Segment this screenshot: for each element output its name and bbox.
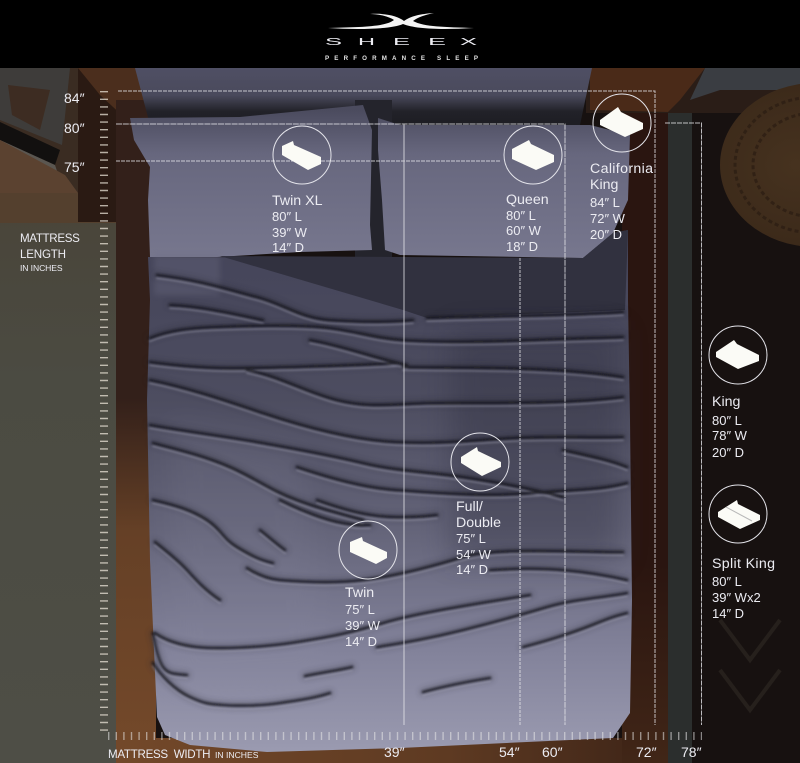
- logo wordmark: E: [428, 37, 447, 48]
- callout: King: 78″ W: [712, 428, 748, 443]
- callout: Split King: 80″ L: [712, 574, 742, 589]
- floor: left side: [0, 215, 118, 763]
- logo: SHEEX Performance Sleep: [325, 13, 478, 62]
- callout: Full/Double: 75″ L: [456, 531, 486, 546]
- callout: Twin: Twin: [345, 585, 374, 601]
- length ruler ticks: [100, 91, 108, 733]
- top right corner: [586, 68, 800, 113]
- length axis labels: 84″: [64, 90, 85, 106]
- width axis labels: 54″: [499, 744, 520, 760]
- width axis labels: 39″: [384, 744, 405, 760]
- logo wordmark: X: [460, 37, 478, 48]
- callout: Full/Double: 54″ W: [456, 547, 492, 562]
- callout: Full/Double: [451, 433, 509, 577]
- shadow behind pillows: [355, 100, 392, 258]
- logo wordmark: E: [393, 37, 411, 48]
- length axis labels: [64, 90, 85, 175]
- axis title: mattress length: [20, 232, 80, 273]
- callout: Queen: 60″ W: [506, 223, 542, 238]
- logo tagline: PERFORMANCE SLEEP: [325, 55, 478, 62]
- headboard post: [78, 68, 165, 222]
- callout: King: 80″ L: [712, 413, 742, 428]
- width axis labels: 78″: [681, 744, 702, 760]
- callout: Twin: [339, 521, 397, 649]
- guide lines for each mattress size: [116, 91, 702, 725]
- callout: Split King: [709, 485, 775, 621]
- callout: California King: California: [590, 161, 653, 177]
- callout: California King: 20″ D: [590, 227, 622, 242]
- axis title: mattress length: MATTRESS: [20, 232, 80, 245]
- callout: King: King: [712, 394, 740, 410]
- callout: Split King: Split King: [712, 556, 775, 572]
- callout: Twin XL: 80″ L: [272, 209, 302, 224]
- logo wordmark: H: [358, 37, 375, 48]
- callout: King: [709, 326, 767, 460]
- header band: [0, 0, 800, 68]
- callout: Twin XL: 39″ W: [272, 225, 308, 240]
- callout: Twin: 75″ L: [345, 602, 375, 617]
- width ruler ticks: [108, 732, 702, 740]
- callout: Queen: [504, 126, 562, 254]
- callout: California King: [590, 94, 653, 242]
- callout: Twin XL: 14″ D: [272, 240, 304, 255]
- callout: California King: 84″ L: [590, 195, 620, 210]
- side table: top left: [0, 68, 118, 223]
- dark floor strip on the right: [668, 110, 692, 763]
- callout: Twin XL: [272, 126, 331, 255]
- width axis labels: 72″: [636, 744, 657, 760]
- width axis labels: 60″: [542, 744, 563, 760]
- axis title: mattress width: IN INCHES: [215, 750, 259, 760]
- logo swoosh mark: [328, 13, 474, 29]
- left bed frame: [116, 100, 156, 763]
- bottom bed frame: [116, 738, 668, 763]
- right pillow: [378, 118, 630, 258]
- left pillow: [130, 105, 372, 257]
- right bed frame: [622, 100, 668, 763]
- sheet shading: [154, 230, 628, 690]
- callout: Queen: Queen: [506, 192, 549, 208]
- axis title: mattress length: LENGTH: [20, 248, 66, 261]
- logo wordmark: S: [325, 37, 343, 48]
- length axis labels: 80″: [64, 120, 85, 136]
- logo wordmark: [325, 37, 478, 48]
- callout: California King: 72″ W: [590, 211, 626, 226]
- callout: Twin XL: Twin XL: [272, 193, 323, 209]
- axis title: mattress width: MATTRESS WIDTH: [108, 748, 210, 761]
- woven pouf: [720, 83, 800, 247]
- callout: California King: King: [590, 177, 618, 193]
- width axis labels: [384, 744, 702, 760]
- callout: Split King: 14″ D: [712, 606, 744, 621]
- callout: Queen: 80″ L: [506, 208, 536, 223]
- top pillows: [135, 68, 592, 125]
- callout: Full/Double: Full/: [456, 499, 483, 515]
- axis title: mattress length: IN INCHES: [20, 263, 63, 273]
- callout: Twin: 14″ D: [345, 634, 377, 649]
- length axis labels: 75″: [64, 159, 85, 175]
- callout: Split King: 39″ Wx2: [712, 590, 761, 605]
- sheet wrinkles: [150, 275, 627, 709]
- callout: Twin: 39″ W: [345, 618, 381, 633]
- axis title: mattress width: [108, 748, 259, 761]
- callout: Queen: 18″ D: [506, 239, 538, 254]
- callout: Full/Double: 14″ D: [456, 562, 488, 577]
- fitted sheet: [147, 230, 632, 752]
- rug on the right: [692, 110, 800, 763]
- callout: King: 20″ D: [712, 445, 744, 460]
- callout: Full/Double: Double: [456, 515, 501, 531]
